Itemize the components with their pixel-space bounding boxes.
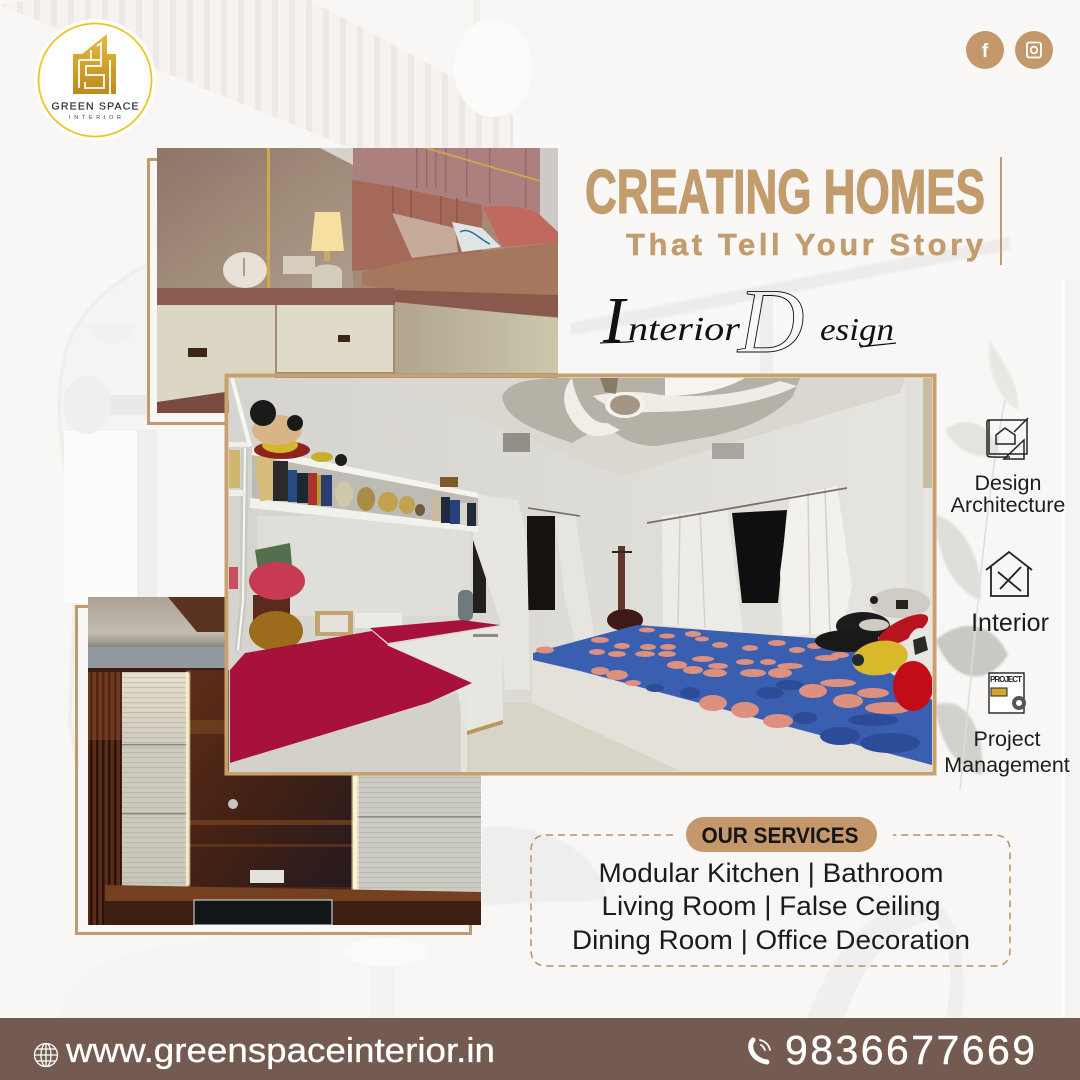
sitar bbox=[607, 546, 643, 631]
left window and curtains bbox=[527, 516, 555, 610]
script title bbox=[600, 270, 896, 372]
photo 3: tv wall unit bbox=[88, 597, 481, 925]
photo 3 frame bbox=[76, 606, 470, 934]
logo wordmark: GREEN SPACE bbox=[52, 100, 138, 112]
icon: globe bbox=[34, 1044, 58, 1066]
mickey toy and decor bbox=[250, 400, 458, 487]
desk cabinet bbox=[388, 626, 503, 731]
label: design architecture: Architecture bbox=[951, 493, 1065, 517]
main photo frame bbox=[226, 376, 934, 774]
icon: phone bbox=[751, 1040, 770, 1062]
main photo: bedroom with study unit bbox=[229, 378, 934, 772]
script title: esign bbox=[820, 311, 894, 347]
website: www.greenspaceinterior.in bbox=[65, 1032, 495, 1070]
photo 1 frame bbox=[148, 160, 226, 424]
headline bbox=[585, 157, 1002, 265]
service icons column bbox=[944, 418, 1070, 777]
script title: D bbox=[736, 270, 804, 372]
icon: logo mark bbox=[73, 34, 116, 94]
bed base bbox=[554, 712, 682, 771]
photo 1: bedroom with bedside lamp bbox=[157, 148, 558, 413]
services list: Modular Kitchen | Bathroom bbox=[598, 858, 944, 888]
our services box bbox=[531, 817, 1010, 966]
right window and curtains bbox=[732, 510, 787, 603]
icon: project: PROJECT bbox=[990, 675, 1022, 684]
ceiling bbox=[686, 378, 905, 456]
pillows and toys bbox=[815, 588, 934, 711]
subtitle: That Tell Your Story bbox=[626, 227, 984, 262]
logo bbox=[34, 19, 156, 141]
script title: I bbox=[602, 284, 628, 357]
label: design architecture: Design bbox=[975, 471, 1041, 495]
services pill bbox=[686, 817, 877, 852]
floor bbox=[467, 703, 683, 771]
icon: facebook: f bbox=[982, 41, 989, 62]
icon: project bbox=[989, 673, 1026, 713]
red mattress bbox=[230, 620, 500, 763]
label: project management: Project bbox=[974, 727, 1040, 751]
desk front bbox=[230, 693, 467, 772]
duvet bbox=[533, 625, 932, 765]
phone number: 9836677669 bbox=[785, 1027, 1035, 1073]
left wall bbox=[257, 516, 324, 616]
label: interior: Interior bbox=[971, 609, 1049, 637]
flowers and desk items bbox=[229, 543, 473, 651]
study unit shelves bbox=[229, 378, 478, 650]
services list: Living Room | False Ceiling bbox=[602, 891, 940, 921]
footer bar bbox=[0, 1018, 1080, 1080]
divider line bbox=[1000, 157, 1002, 265]
label: project management: Management bbox=[944, 753, 1070, 777]
icon: interior bbox=[986, 552, 1032, 596]
icon: design architecture bbox=[987, 418, 1028, 459]
script title: nterior bbox=[628, 311, 741, 348]
right wall strip bbox=[905, 380, 923, 615]
services heading: OUR SERVICES bbox=[702, 823, 858, 848]
social icons bbox=[966, 31, 1053, 69]
services list: Dining Room | Office Decoration bbox=[572, 925, 970, 955]
icon: instagram bbox=[1015, 31, 1053, 69]
logo tagline: INTERIOR bbox=[69, 115, 121, 121]
